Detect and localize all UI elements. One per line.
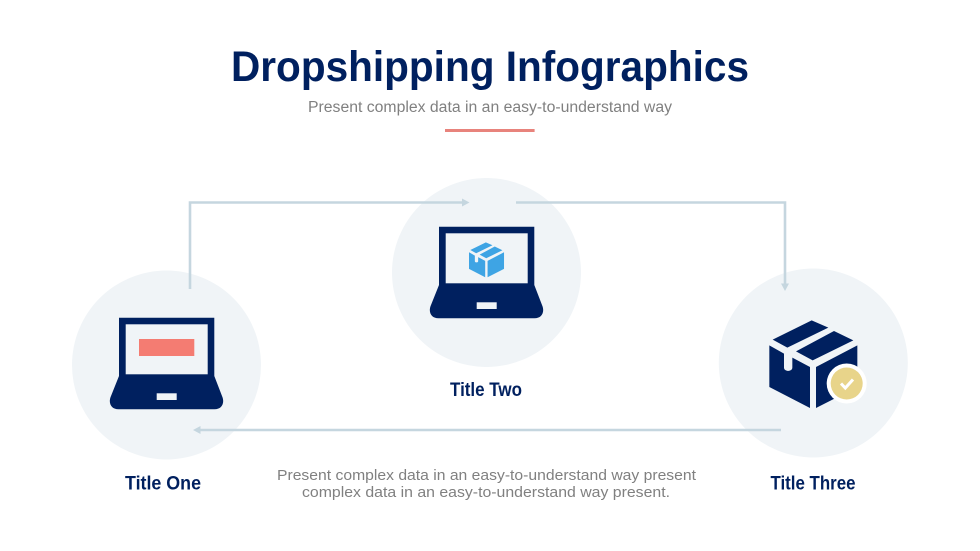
arrow: title two to title three [516,202,789,291]
label: title three: Title Three [770,474,856,494]
label: title one: Title One [125,474,201,494]
icon: laptop with coral banner [110,318,223,409]
icon: laptop with blue package [430,227,543,318]
panel: circle three background [719,268,908,458]
arrow: title one to title two [190,198,470,289]
title underline accent [445,129,535,132]
icon: package with check badge [769,320,867,408]
body text: complex data in an easy-to-understand way present. [302,484,670,501]
body text [277,467,697,501]
arrow: title three to title one [193,426,781,434]
body text: Present complex data in an easy-to-understand way present [277,467,697,484]
subtitle: Present complex data in an easy-to-understand way [308,99,672,116]
panel: circle two background [392,178,581,367]
title: Dropshipping Infographics [231,43,749,91]
label: title two: Title Two [450,380,522,401]
panel: circle one background [72,270,261,460]
